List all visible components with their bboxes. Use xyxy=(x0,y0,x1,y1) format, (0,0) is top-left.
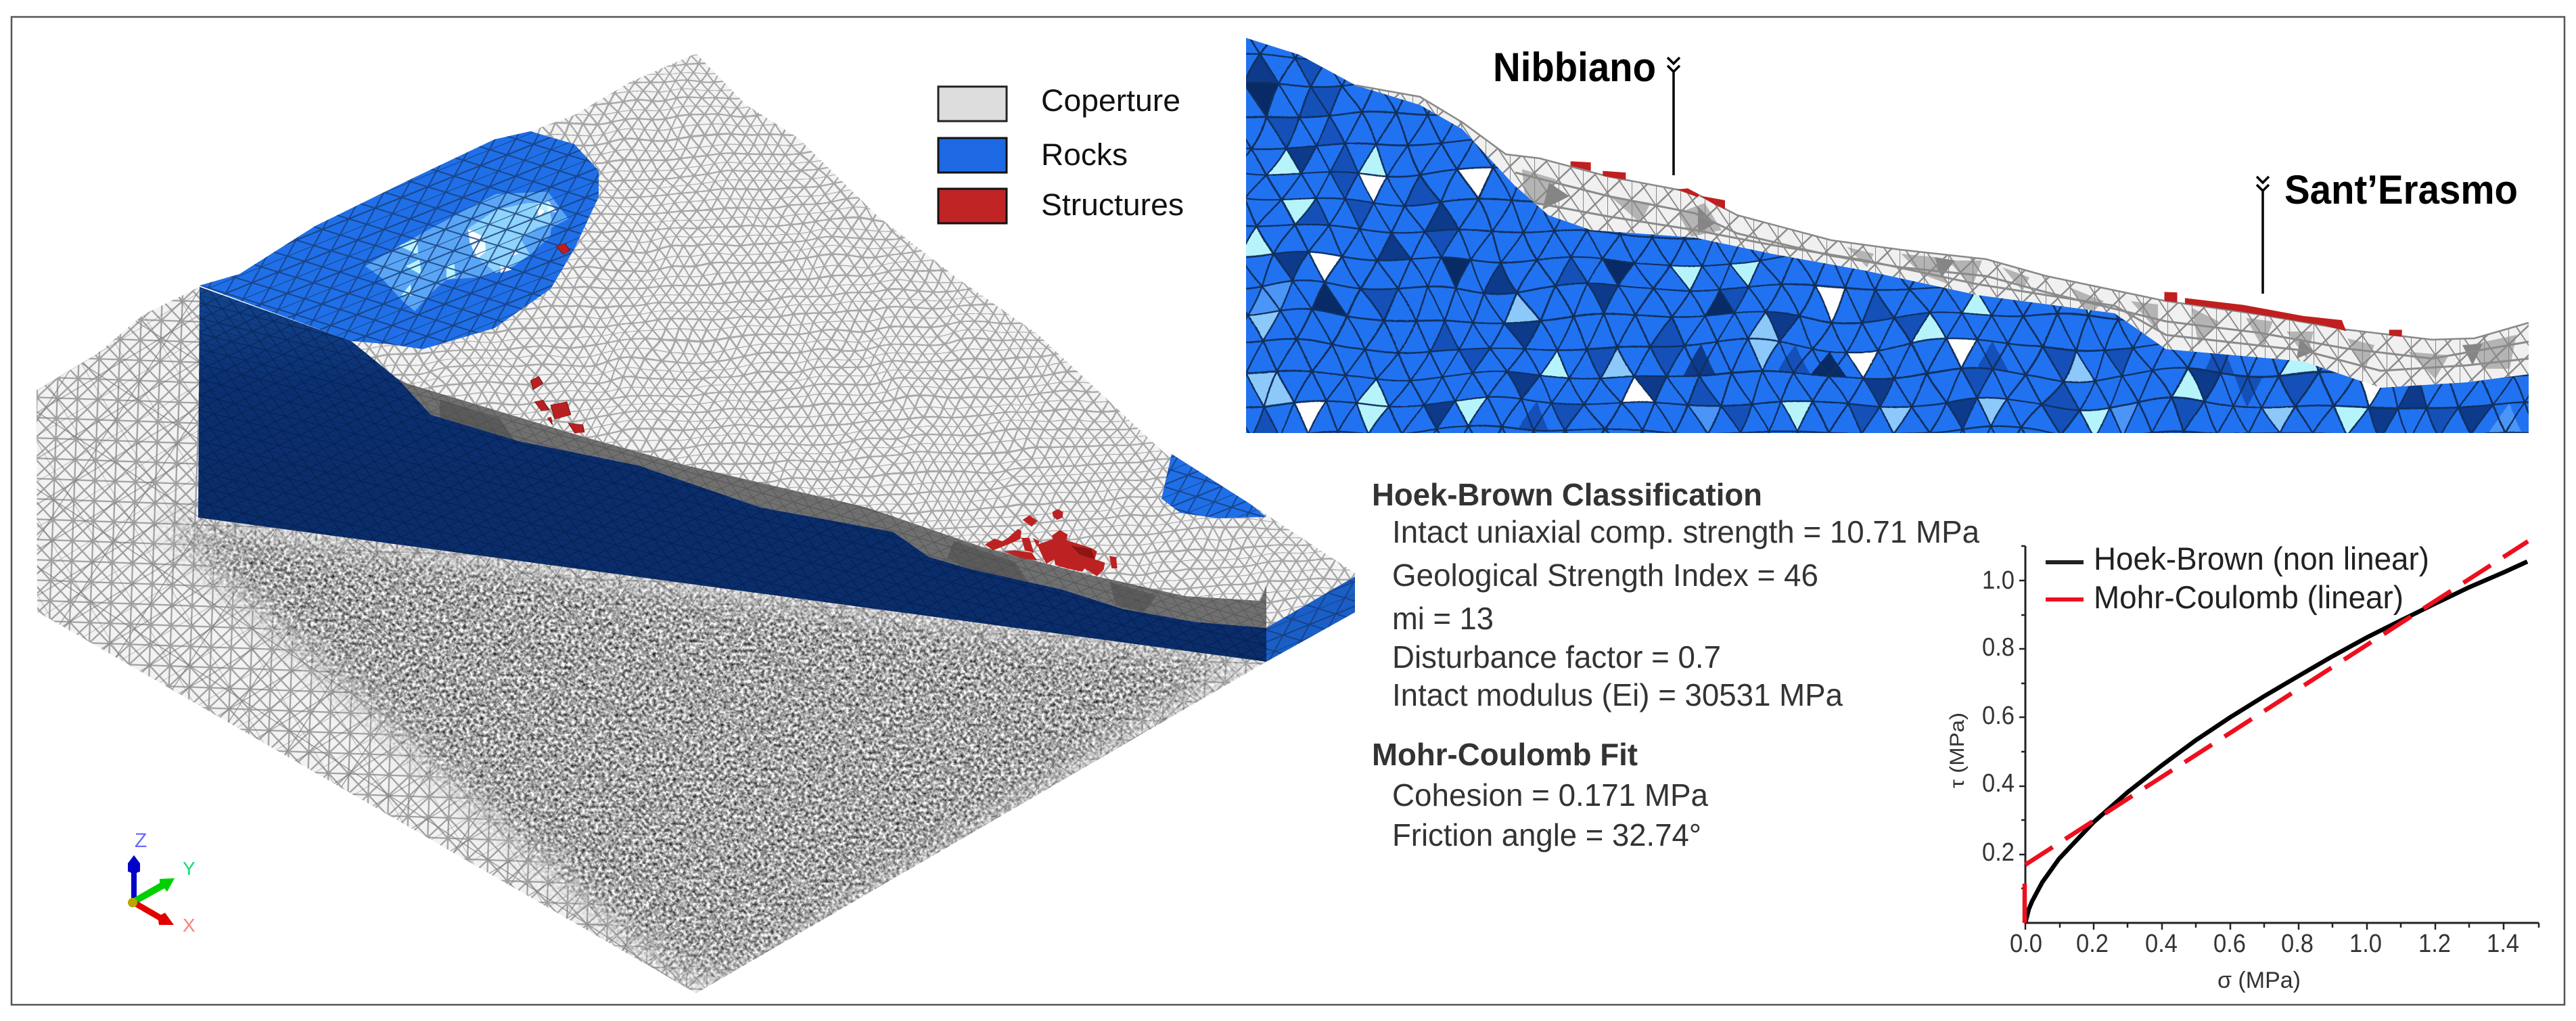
text block: Hoek-Brown classification: Intact modulus (Ei) = 30531 MPa xyxy=(1392,677,1843,712)
icon: XYZ axis triad xyxy=(128,830,196,936)
red structures: upper cluster xyxy=(531,244,584,433)
text block: Hoek-Brown classification xyxy=(1372,477,1979,712)
text block: Mohr-Coulomb fit: Cohesion = 0.171 MPa xyxy=(1392,777,1708,813)
icon: XYZ axis triad: Z xyxy=(135,830,147,852)
chart axes and ticks xyxy=(2025,546,2539,923)
coverage mesh xyxy=(1346,74,2537,399)
chart legend: Hoek-Brown (non linear) xyxy=(2094,541,2429,576)
text block: Hoek-Brown classification: Disturbance factor = 0.7 xyxy=(1392,639,1721,675)
chart legend xyxy=(2046,541,2429,615)
label: Sant'Erasmo with marker: Sant’Erasmo xyxy=(2284,167,2518,212)
legend: structures xyxy=(938,187,1184,223)
x-axis title: σ (MPa) xyxy=(2217,968,2301,993)
gray coverage section band xyxy=(351,341,1266,628)
panel: 3D slope mesh model xyxy=(27,41,1380,1001)
x-axis labels: 0.4 xyxy=(2145,930,2178,958)
x-axis labels: 0.0 xyxy=(2010,930,2042,958)
text block: Mohr-Coulomb fit: Mohr-Coulomb Fit xyxy=(1372,737,1638,772)
line chart: failure envelopes xyxy=(1946,541,2539,993)
dark blue section face: rocks xyxy=(198,287,1266,662)
y-axis labels: 1.0 xyxy=(1982,566,2015,595)
top surface mesh: coperture xyxy=(189,41,1380,650)
x-axis labels: 1.0 xyxy=(2349,930,2382,958)
x-axis labels: 0.8 xyxy=(2281,930,2314,958)
text block: Mohr-Coulomb fit: Friction angle = 32.74° xyxy=(1392,817,1701,853)
legend: structures: Structures xyxy=(1041,187,1184,222)
legend: coperture: Coperture xyxy=(1041,83,1180,118)
blue patch at right of surface xyxy=(1162,454,1266,518)
x-axis labels: 0.6 xyxy=(2213,930,2246,958)
legend: coperture xyxy=(938,83,1180,121)
lower mesh volume xyxy=(27,277,1312,1001)
y-axis title: τ (MPa) xyxy=(1946,712,1969,788)
text block: Hoek-Brown classification: mi = 13 xyxy=(1392,601,1494,636)
y-axis labels: 0.8 xyxy=(1982,633,2015,662)
y-axis labels: 0.2 xyxy=(1982,838,2015,867)
text block: Mohr-Coulomb fit xyxy=(1372,737,1708,853)
panel: 2D cross section mesh xyxy=(1246,38,2529,433)
line: Mohr-Coulomb xyxy=(2025,541,2528,923)
label: Nibbiano with marker xyxy=(1493,45,1680,175)
red structures: lower cluster xyxy=(985,509,1118,576)
right blue face xyxy=(1266,576,1355,662)
section outline xyxy=(1356,85,2529,340)
x-axis labels xyxy=(2010,930,2519,958)
chart legend: Mohr-Coulomb (linear) xyxy=(2094,579,2404,615)
x-axis labels: 1.2 xyxy=(2418,930,2451,958)
x-axis labels: 1.4 xyxy=(2487,930,2519,958)
x-axis labels: 0.2 xyxy=(2076,930,2109,958)
text block: Hoek-Brown classification: Geological Strength Index = 46 xyxy=(1392,558,1818,593)
blue surface: exposed rocks with light patch xyxy=(200,131,599,349)
legend: rocks xyxy=(938,137,1128,173)
text block: Hoek-Brown classification: Intact uniaxial comp. strength = 10.71 MPa xyxy=(1392,514,1979,549)
y-axis labels: 0.6 xyxy=(1982,702,2015,730)
text block: Hoek-Brown classification: Hoek-Brown Classification xyxy=(1372,477,1762,512)
label: Nibbiano with marker: Nibbiano xyxy=(1493,45,1656,90)
red structures on section xyxy=(1571,161,2402,337)
legend: rocks: Rocks xyxy=(1041,137,1128,172)
y-axis labels xyxy=(1982,566,2015,867)
rock mesh xyxy=(1246,38,2529,433)
y-axis labels: 0.4 xyxy=(1982,769,2015,798)
legend xyxy=(938,83,1184,223)
curve: Hoek-Brown xyxy=(2025,562,2527,923)
icon: XYZ axis triad: X xyxy=(183,915,196,936)
icon: XYZ axis triad: Y xyxy=(183,858,196,879)
label: Sant'Erasmo with marker xyxy=(2257,167,2518,294)
